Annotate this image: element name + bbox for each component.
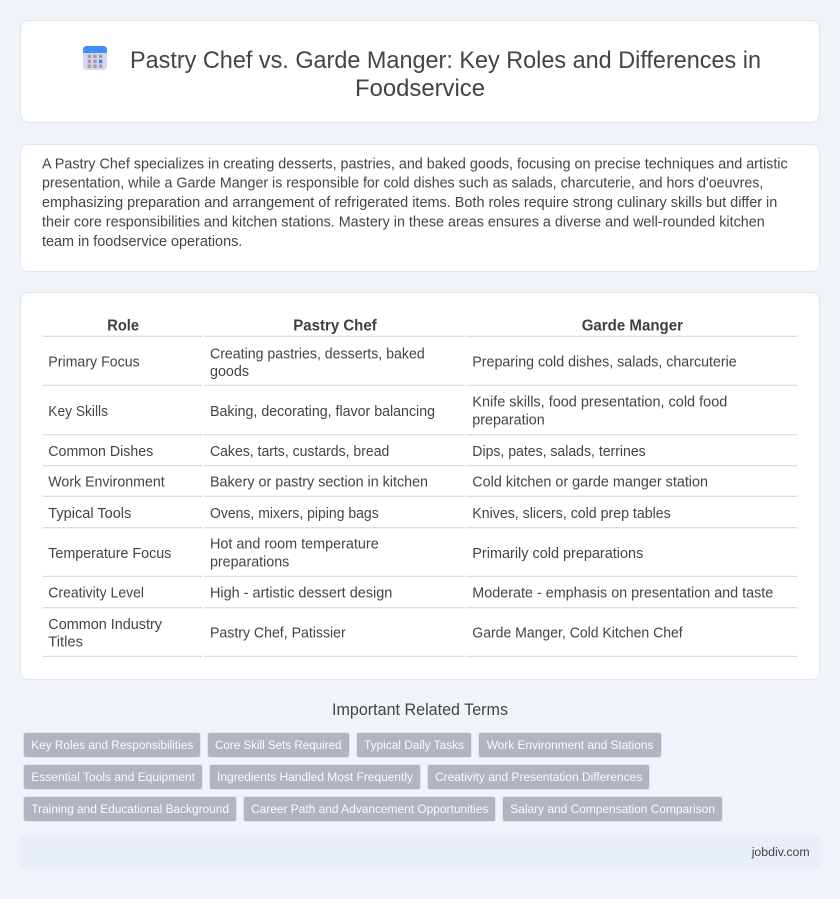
tag: daily tasks: Typical Daily Tasks xyxy=(364,738,464,752)
row: common industry titles: Pastry Chef, Patissier xyxy=(210,626,346,642)
text block: introduction paragraph: team in foodservice operations. xyxy=(42,234,242,250)
row: primary focus: goods xyxy=(210,364,249,380)
row: temperature focus: Temperature Focus xyxy=(48,546,171,562)
row: work environment: Cold kitchen or garde manger station xyxy=(472,475,708,491)
tag: core skills: Core Skill Sets Required xyxy=(215,738,342,752)
row: primary focus: Preparing cold dishes, salads, charcuterie xyxy=(472,355,737,371)
row: temperature focus: preparations xyxy=(210,555,289,571)
row: primary focus xyxy=(48,346,737,380)
tag: tools xyxy=(24,764,202,790)
row: common dishes xyxy=(48,444,646,460)
tag: training: Training and Educational Background xyxy=(31,802,229,816)
row: work environment: Work Environment xyxy=(48,475,165,491)
row: creativity level: Creativity Level xyxy=(48,586,144,602)
table header row: Pastry Chef xyxy=(293,318,377,335)
row: common industry titles xyxy=(48,617,684,651)
tag: key roles: Key Roles and Responsibilities xyxy=(31,738,193,752)
panel: header xyxy=(20,20,820,122)
tag: daily tasks xyxy=(356,732,472,758)
panel: introduction xyxy=(20,144,820,272)
row: work environment: Bakery or pastry section in kitchen xyxy=(210,475,428,491)
row: common dishes: Cakes, tarts, custards, bread xyxy=(210,444,389,460)
tag: core skills xyxy=(208,732,350,758)
tag list: related terms xyxy=(24,732,722,822)
row: common dishes: Dips, pates, salads, terrines xyxy=(472,444,646,460)
row: typical tools xyxy=(48,506,671,522)
text block: introduction paragraph: A Pastry Chef specializes in creating desserts, pastries, and baked goods, focusing on precise techniques and artistic xyxy=(42,156,788,172)
text block: introduction paragraph: their core responsibilities and kitchen stations. Mastery in these areas ensures a diverse and well-rounded kitchen xyxy=(42,215,765,231)
table header row: Garde Manger xyxy=(582,318,683,335)
row: key skills: Key Skills xyxy=(48,404,108,420)
icon: calendar xyxy=(83,46,107,70)
row: typical tools: Ovens, mixers, piping bags xyxy=(210,506,379,522)
row: key skills: Baking, decorating, flavor balancing xyxy=(210,404,435,420)
footer xyxy=(20,835,820,869)
tag: work environment: Work Environment and Stations xyxy=(487,738,653,752)
row: creativity level xyxy=(48,586,773,602)
row: key skills xyxy=(48,395,727,429)
row: typical tools: Typical Tools xyxy=(48,506,131,522)
tag: ingredients xyxy=(210,764,420,790)
tag: career path: Career Path and Advancement Opportunities xyxy=(251,802,488,816)
row: typical tools: Knives, slicers, cold prep tables xyxy=(472,506,671,522)
tag: work environment xyxy=(478,732,662,758)
row: creativity level: High - artistic dessert design xyxy=(210,586,392,602)
row: primary focus: Creating pastries, desserts, baked xyxy=(210,346,425,362)
table header row xyxy=(107,318,683,335)
text block: introduction paragraph: emphasizing preparation and arrangement of refrigerated items. Both roles require strong culinary skills but differ in xyxy=(42,195,777,211)
row: common industry titles: Titles xyxy=(48,635,83,651)
row: temperature focus: Hot and room temperature xyxy=(210,537,379,553)
tag: salary: Salary and Compensation Comparison xyxy=(510,802,715,816)
tag: ingredients: Ingredients Handled Most Frequently xyxy=(217,770,414,784)
row: common industry titles: Common Industry xyxy=(48,617,163,633)
row: temperature focus: Primarily cold preparations xyxy=(472,546,643,562)
panel: comparison table xyxy=(20,292,820,680)
row: key skills: Knife skills, food presentation, cold food xyxy=(472,395,727,411)
title: Foodservice xyxy=(355,75,485,102)
tag: creativity: Creativity and Presentation Differences xyxy=(435,770,642,784)
title: Pastry Chef vs. Garde Manger: Key Roles and Differences in xyxy=(130,47,761,74)
row: common industry titles: Garde Manger, Cold Kitchen Chef xyxy=(472,626,684,642)
heading: important related terms: Important Related Terms xyxy=(332,701,508,719)
row: temperature focus xyxy=(48,537,643,571)
title xyxy=(130,47,761,102)
tag: tools: Essential Tools and Equipment xyxy=(31,770,196,784)
tag: key roles xyxy=(24,732,200,758)
tag: creativity xyxy=(428,764,650,790)
text block: introduction paragraph xyxy=(42,156,788,250)
table header row: Role xyxy=(107,318,139,335)
tag: salary xyxy=(502,796,722,822)
tag: career path xyxy=(244,796,496,822)
tag: training xyxy=(24,796,236,822)
row: primary focus: Primary Focus xyxy=(48,355,140,371)
row: creativity level: Moderate - emphasis on presentation and taste xyxy=(472,586,773,602)
row: key skills: preparation xyxy=(472,413,545,429)
row: common dishes: Common Dishes xyxy=(48,444,153,460)
text block: introduction paragraph: presentation, while a Garde Manger is responsible for cold dishes such as salads, charcuterie, and hors d'oeuvres, xyxy=(42,176,763,192)
footer: jobdiv.com xyxy=(751,845,810,859)
row: work environment xyxy=(48,475,708,491)
